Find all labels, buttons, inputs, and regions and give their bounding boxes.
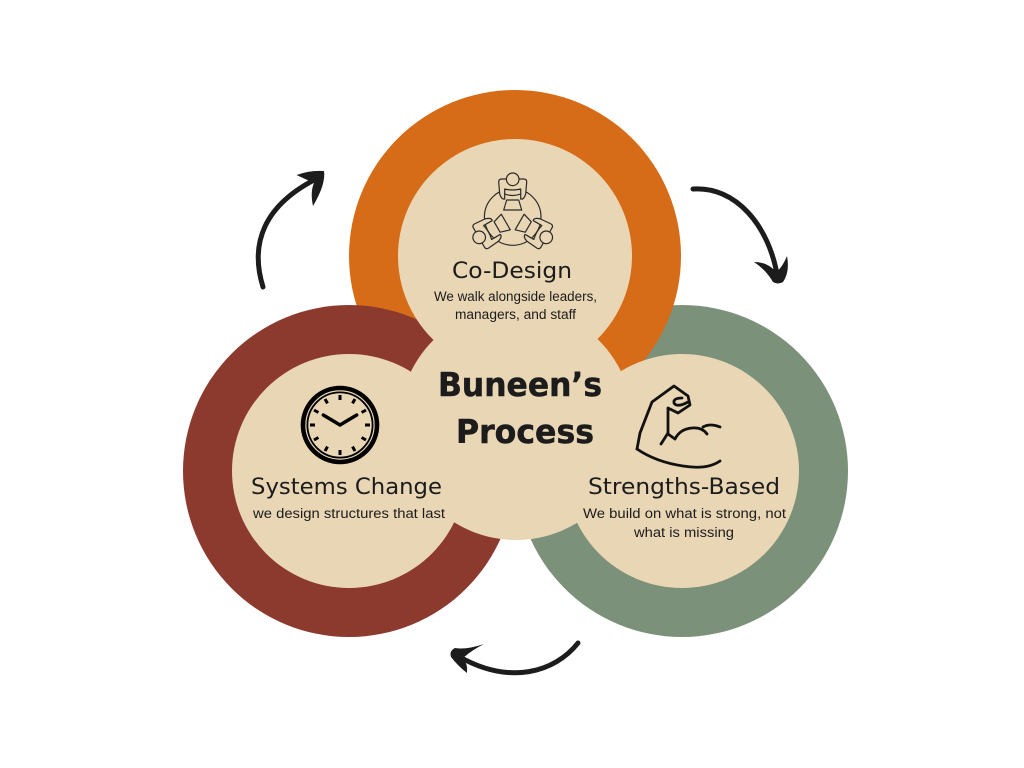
arrow: systems change to co-design [258, 171, 324, 287]
text: strengths-based description [583, 506, 786, 540]
ring: strengths-based [516, 305, 848, 637]
centre circle [399, 306, 633, 540]
text: co-design description: managers, and staff [455, 307, 576, 322]
heading: co-design: Co-Design [452, 259, 572, 284]
inner circle: strengths-based [565, 354, 799, 588]
title [438, 365, 602, 451]
title: Process [456, 412, 594, 451]
arrow: co-design to strengths-based [693, 189, 788, 284]
arrow: strengths-based to systems change [450, 643, 578, 673]
ring: co-design [349, 90, 681, 422]
heading: strengths-based: Strengths-Based [588, 475, 780, 500]
text: co-design description [434, 289, 597, 322]
ring: systems change [183, 305, 515, 637]
text: strengths-based description: We build on what is strong, not [583, 506, 786, 521]
inner circle: systems change [232, 354, 466, 588]
text: co-design description: We walk alongside leaders, [434, 289, 597, 304]
icon: people around a table [467, 173, 559, 253]
text: systems change description: we design structures that last [252, 506, 445, 521]
inner circle: co-design [398, 139, 632, 373]
title: Buneen’s [438, 365, 602, 404]
heading: systems change: Systems Change [251, 475, 442, 500]
icon: flexed arm [637, 386, 720, 467]
icon: clock [303, 388, 377, 462]
text: strengths-based description: what is missing [633, 525, 734, 540]
